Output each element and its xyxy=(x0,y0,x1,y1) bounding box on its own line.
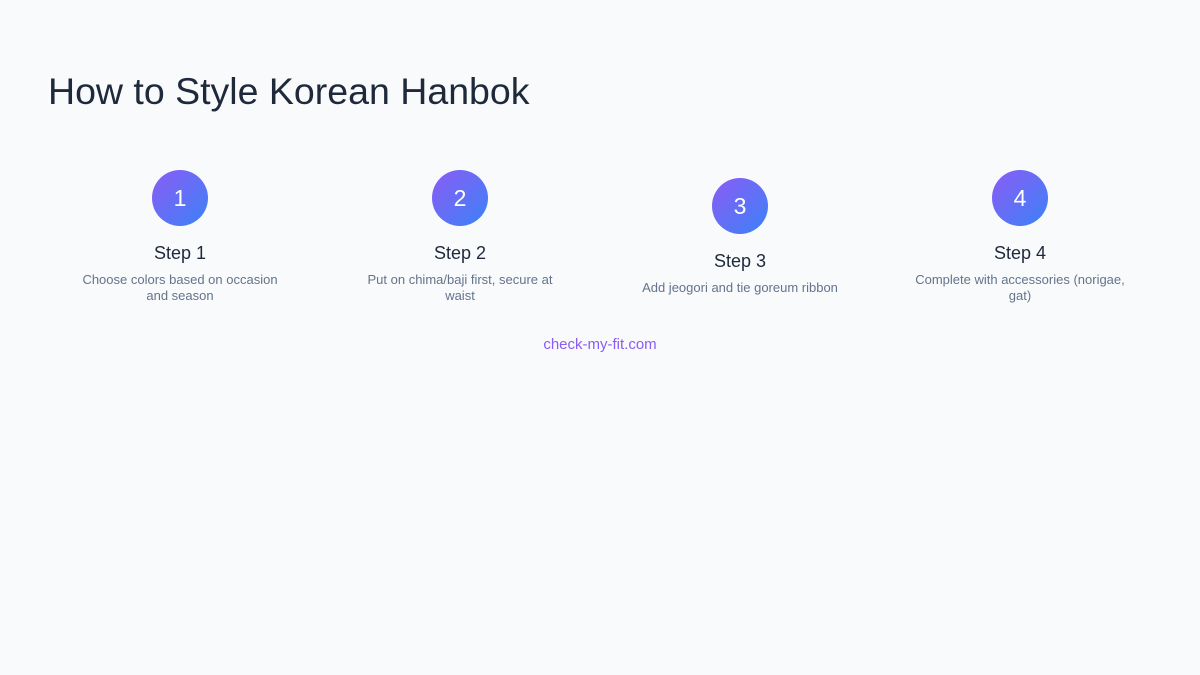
title: How to Style Korean Hanbok xyxy=(48,70,530,112)
step 2 description: Put on chima/baji first, secure at waist xyxy=(368,272,552,303)
step 4 xyxy=(915,170,1125,303)
footer link: check-my-fit.com xyxy=(543,336,657,353)
icon: circle 2 xyxy=(432,170,488,226)
icon: circle 1: 1 xyxy=(174,185,186,211)
step 4 description: Complete with accessories (norigae, gat) xyxy=(915,272,1125,303)
step 4 label: Step 4 xyxy=(994,243,1046,263)
icon: circle 1 xyxy=(152,170,208,226)
icon: circle 2: 2 xyxy=(454,185,466,211)
icon: circle 3: 3 xyxy=(734,193,746,219)
step 3 label: Step 3 xyxy=(714,251,766,271)
step 2 label: Step 2 xyxy=(434,243,486,263)
step 1 label: Step 1 xyxy=(154,243,206,263)
icon: circle 4: 4 xyxy=(1014,185,1026,211)
step 3 xyxy=(642,178,838,295)
step 1 xyxy=(82,170,278,303)
icon: circle 3 xyxy=(712,178,768,234)
step 1 description: Choose colors based on occasion and season xyxy=(82,272,278,303)
icon: circle 4 xyxy=(992,170,1048,226)
step 3 description: Add jeogori and tie goreum ribbon xyxy=(642,280,838,295)
step 2 xyxy=(368,170,552,303)
